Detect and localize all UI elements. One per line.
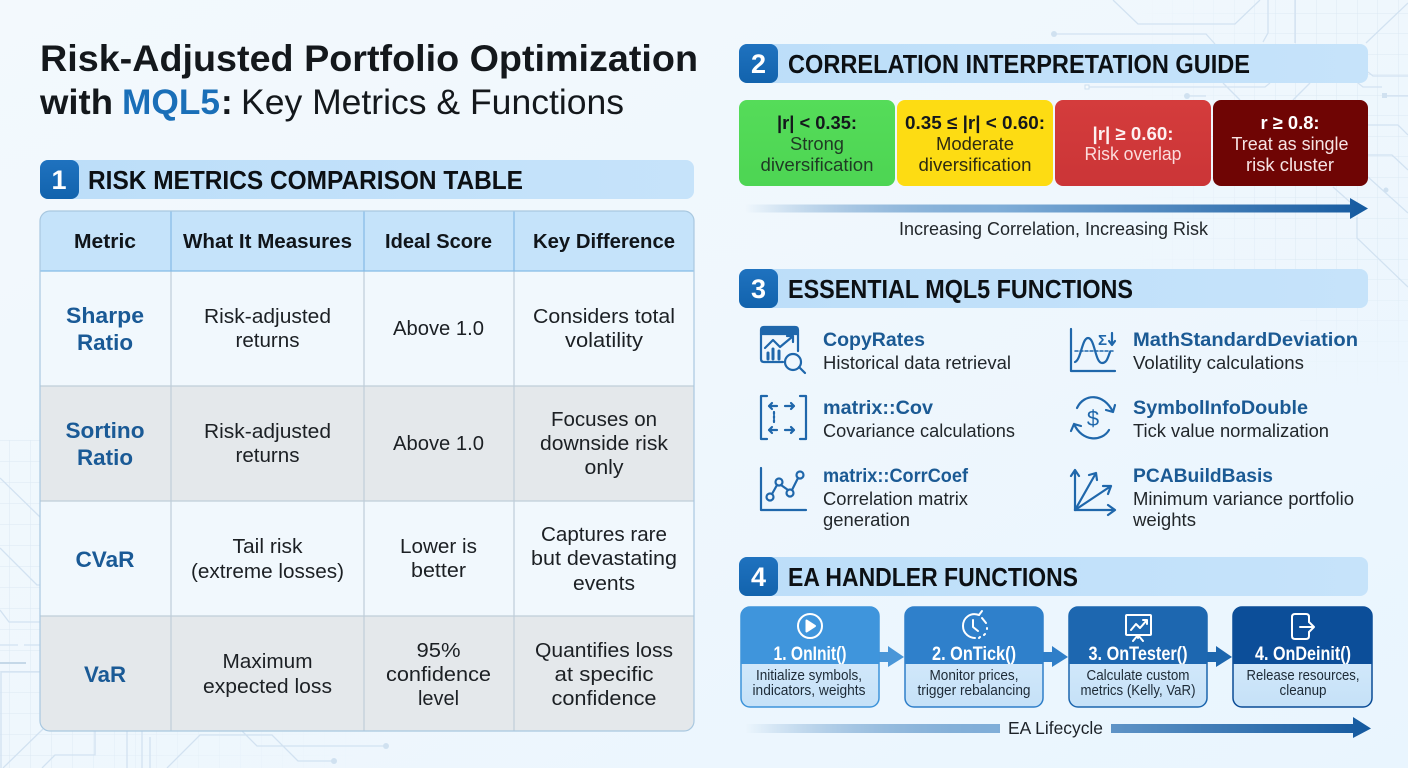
step 3: OnTester: metrics (Kelly, VaR) [1080,683,1196,699]
table header row: Key Difference [533,231,675,253]
arrow: EA lifecycle [745,717,1371,738]
function: PCABuildBasis: weights [1132,510,1196,530]
row: Sharpe Ratio: Considers total [533,306,675,328]
row: CVaR: (extreme losses) [191,561,344,583]
row: CVaR: Lower is [400,536,477,558]
step 4: OnDeinit: cleanup [1280,683,1326,699]
row: Sharpe Ratio: returns [236,330,300,352]
row: CVaR [76,524,677,595]
row: Sortino Ratio [66,409,669,479]
step 1: OnInit: indicators, weights [752,683,866,699]
icon: chart with magnifier [761,327,805,373]
icon: dollar exchange [1071,397,1115,438]
card: moderate diversification [897,100,1053,186]
card: moderate diversification: Moderate [936,133,1014,154]
table header row: Ideal Score [385,231,492,253]
row: Sortino Ratio: downside risk [540,433,669,455]
panel: correlation interpretation guide [739,44,1368,239]
heading: section 2: CORRELATION INTERPRETATION GUIDE [788,49,1250,79]
heading: section 2 [739,44,1368,83]
icon: dollar exchange: $ [1087,406,1099,431]
step 4: OnDeinit: 4. OnDeinit() [1255,644,1351,665]
step 2: OnTick: 2. OnTick() [932,644,1016,665]
row: Sortino Ratio: Sortino [66,418,144,443]
card: moderate diversification: diversification [918,154,1032,175]
step 4: OnDeinit: Release resources, [1246,668,1360,684]
heading: section 4 [739,557,1368,596]
title: Key Metrics & Functions [241,83,624,122]
panel: EA handler functions [739,557,1372,738]
heading: section 2: 2 [751,49,766,79]
step 3: OnTester: 3. OnTester() [1088,644,1188,665]
row: VaR: at specific [554,664,654,686]
row: Sharpe Ratio: Risk-adjusted [204,306,331,328]
function: matrix::Cov: matrix::Cov [823,397,933,419]
step 2: OnTick: trigger rebalancing [918,683,1030,699]
step 4: OnDeinit [1233,607,1372,707]
heading: section 1: RISK METRICS COMPARISON TABLE [88,165,523,195]
function: PCABuildBasis: PCABuildBasis [1133,465,1273,487]
row: Sortino Ratio: only [584,457,624,479]
row: VaR: expected loss [203,676,332,698]
arrow: OnTester to OnDeinit [1207,646,1232,667]
step 1: OnInit: 1. OnInit() [774,644,846,665]
heading: section 1: 1 [51,165,67,195]
icon: exit [1292,614,1314,639]
heading: section 3: 3 [751,274,766,304]
step 2: OnTick: Monitor prices, [930,668,1018,684]
row: VaR [84,640,673,710]
icon: correlation line chart [761,468,806,510]
function: MathStandardDeviation: Volatility calculations [1133,353,1304,373]
function: SymbolInfoDouble: SymbolInfoDouble [1133,397,1308,419]
row: Sortino Ratio: Above 1.0 [393,433,484,455]
heading: section 1 [40,160,694,199]
function: MathStandardDeviation [1071,329,1358,373]
row: VaR: VaR [84,662,126,687]
function: PCABuildBasis: Minimum variance portfolio [1133,489,1354,509]
label: increasing correlation, increasing risk: Increasing Correlation, Increasing Risk [899,219,1209,239]
title: MQL5 [122,83,220,122]
card: risk overlap [1055,100,1211,186]
heading: section 3: ESSENTIAL MQL5 FUNCTIONS [788,274,1133,304]
function: matrix::CorrCoef: matrix::CorrCoef [823,465,968,487]
icon: covariance matrix [761,396,806,439]
table header row: Metric [74,231,136,253]
card: strong diversification: Strong [790,133,844,154]
icon: clock [963,611,987,638]
row: CVaR: CVaR [76,547,135,572]
row: CVaR: Captures rare [541,524,667,546]
row: Sortino Ratio: Risk-adjusted [204,421,331,443]
title: Risk-Adjusted Portfolio Optimization [40,38,698,79]
panel: essential MQL5 functions [739,269,1368,530]
function: SymbolInfoDouble [1071,397,1329,441]
row: VaR: Quantifies loss [535,640,673,662]
row: CVaR: events [573,573,635,595]
card: strong diversification: |r| < 0.35: [777,112,857,133]
step 1: OnInit [741,607,879,707]
icon: play [798,614,822,638]
step 3: OnTester [1069,607,1207,707]
function: CopyRates: CopyRates [823,329,925,351]
step 2: OnTick [905,607,1043,707]
title: : [221,83,233,122]
card: single risk cluster [1213,100,1368,186]
row: VaR: confidence [386,664,491,686]
heading: section 4: EA HANDLER FUNCTIONS [788,562,1078,592]
row: VaR: 95% [416,640,461,662]
card: single risk cluster: r ≥ 0.8: [1260,112,1320,133]
icon: standard deviation wave: Σ [1098,332,1107,349]
icon: presentation chart [1126,615,1151,641]
row: Sharpe Ratio [66,303,675,355]
step 1: OnInit: Initialize symbols, [756,668,862,684]
card: strong diversification [739,100,895,186]
function: CopyRates [761,327,1011,373]
icon: standard deviation wave [1071,329,1115,371]
function: PCABuildBasis [1071,465,1354,530]
title [39,38,698,122]
row: Sortino Ratio: Ratio [77,445,133,470]
card: moderate diversification: 0.35 ≤ |r| < 0.60: [905,112,1045,133]
function: matrix::CorrCoef: generation [823,510,910,530]
row: VaR: confidence [552,688,656,710]
card: strong diversification: diversification [760,154,874,175]
card: single risk cluster: Treat as single [1232,133,1348,154]
row: Sharpe Ratio: Ratio [77,330,133,355]
row: Sharpe Ratio: volatility [565,330,643,352]
title: with [39,83,113,122]
row: Sortino Ratio: Focuses on [551,409,657,431]
icon: PCA vectors [1071,470,1115,515]
card: risk overlap: Risk overlap [1084,143,1182,164]
arrow: OnTick to OnTester [1043,646,1068,667]
function: matrix::CorrCoef [761,465,968,530]
function: matrix::Cov [761,396,1015,441]
function: matrix::Cov: Covariance calculations [823,421,1015,441]
row: CVaR: better [411,560,466,582]
card: risk overlap: |r| ≥ 0.60: [1092,123,1174,144]
arrow: OnInit to OnTick [879,646,904,667]
card: single risk cluster: risk cluster [1246,154,1334,175]
row: VaR: Maximum [222,651,312,673]
comparison table [40,211,694,731]
step 3: OnTester: Calculate custom [1086,668,1190,684]
row: Sharpe Ratio: Sharpe [66,303,144,328]
function: MathStandardDeviation: MathStandardDeviation [1133,329,1358,351]
row: Sortino Ratio: returns [236,445,300,467]
function: matrix::CorrCoef: Correlation matrix [823,489,968,509]
row: CVaR: Tail risk [232,536,304,558]
heading: section 3 [739,269,1368,308]
panel: risk metrics comparison table [40,160,694,731]
function: SymbolInfoDouble: Tick value normalization [1133,421,1329,441]
label: EA lifecycle: EA Lifecycle [1008,718,1103,738]
row: CVaR: but devastating [531,548,677,570]
table header row [74,231,675,253]
row: VaR: level [418,688,459,710]
function: CopyRates: Historical data retrieval [823,353,1011,373]
row: Sharpe Ratio: Above 1.0 [393,318,484,340]
heading: section 4: 4 [751,562,766,592]
table header row: What It Measures [183,231,352,253]
arrow: increasing correlation [745,198,1368,219]
